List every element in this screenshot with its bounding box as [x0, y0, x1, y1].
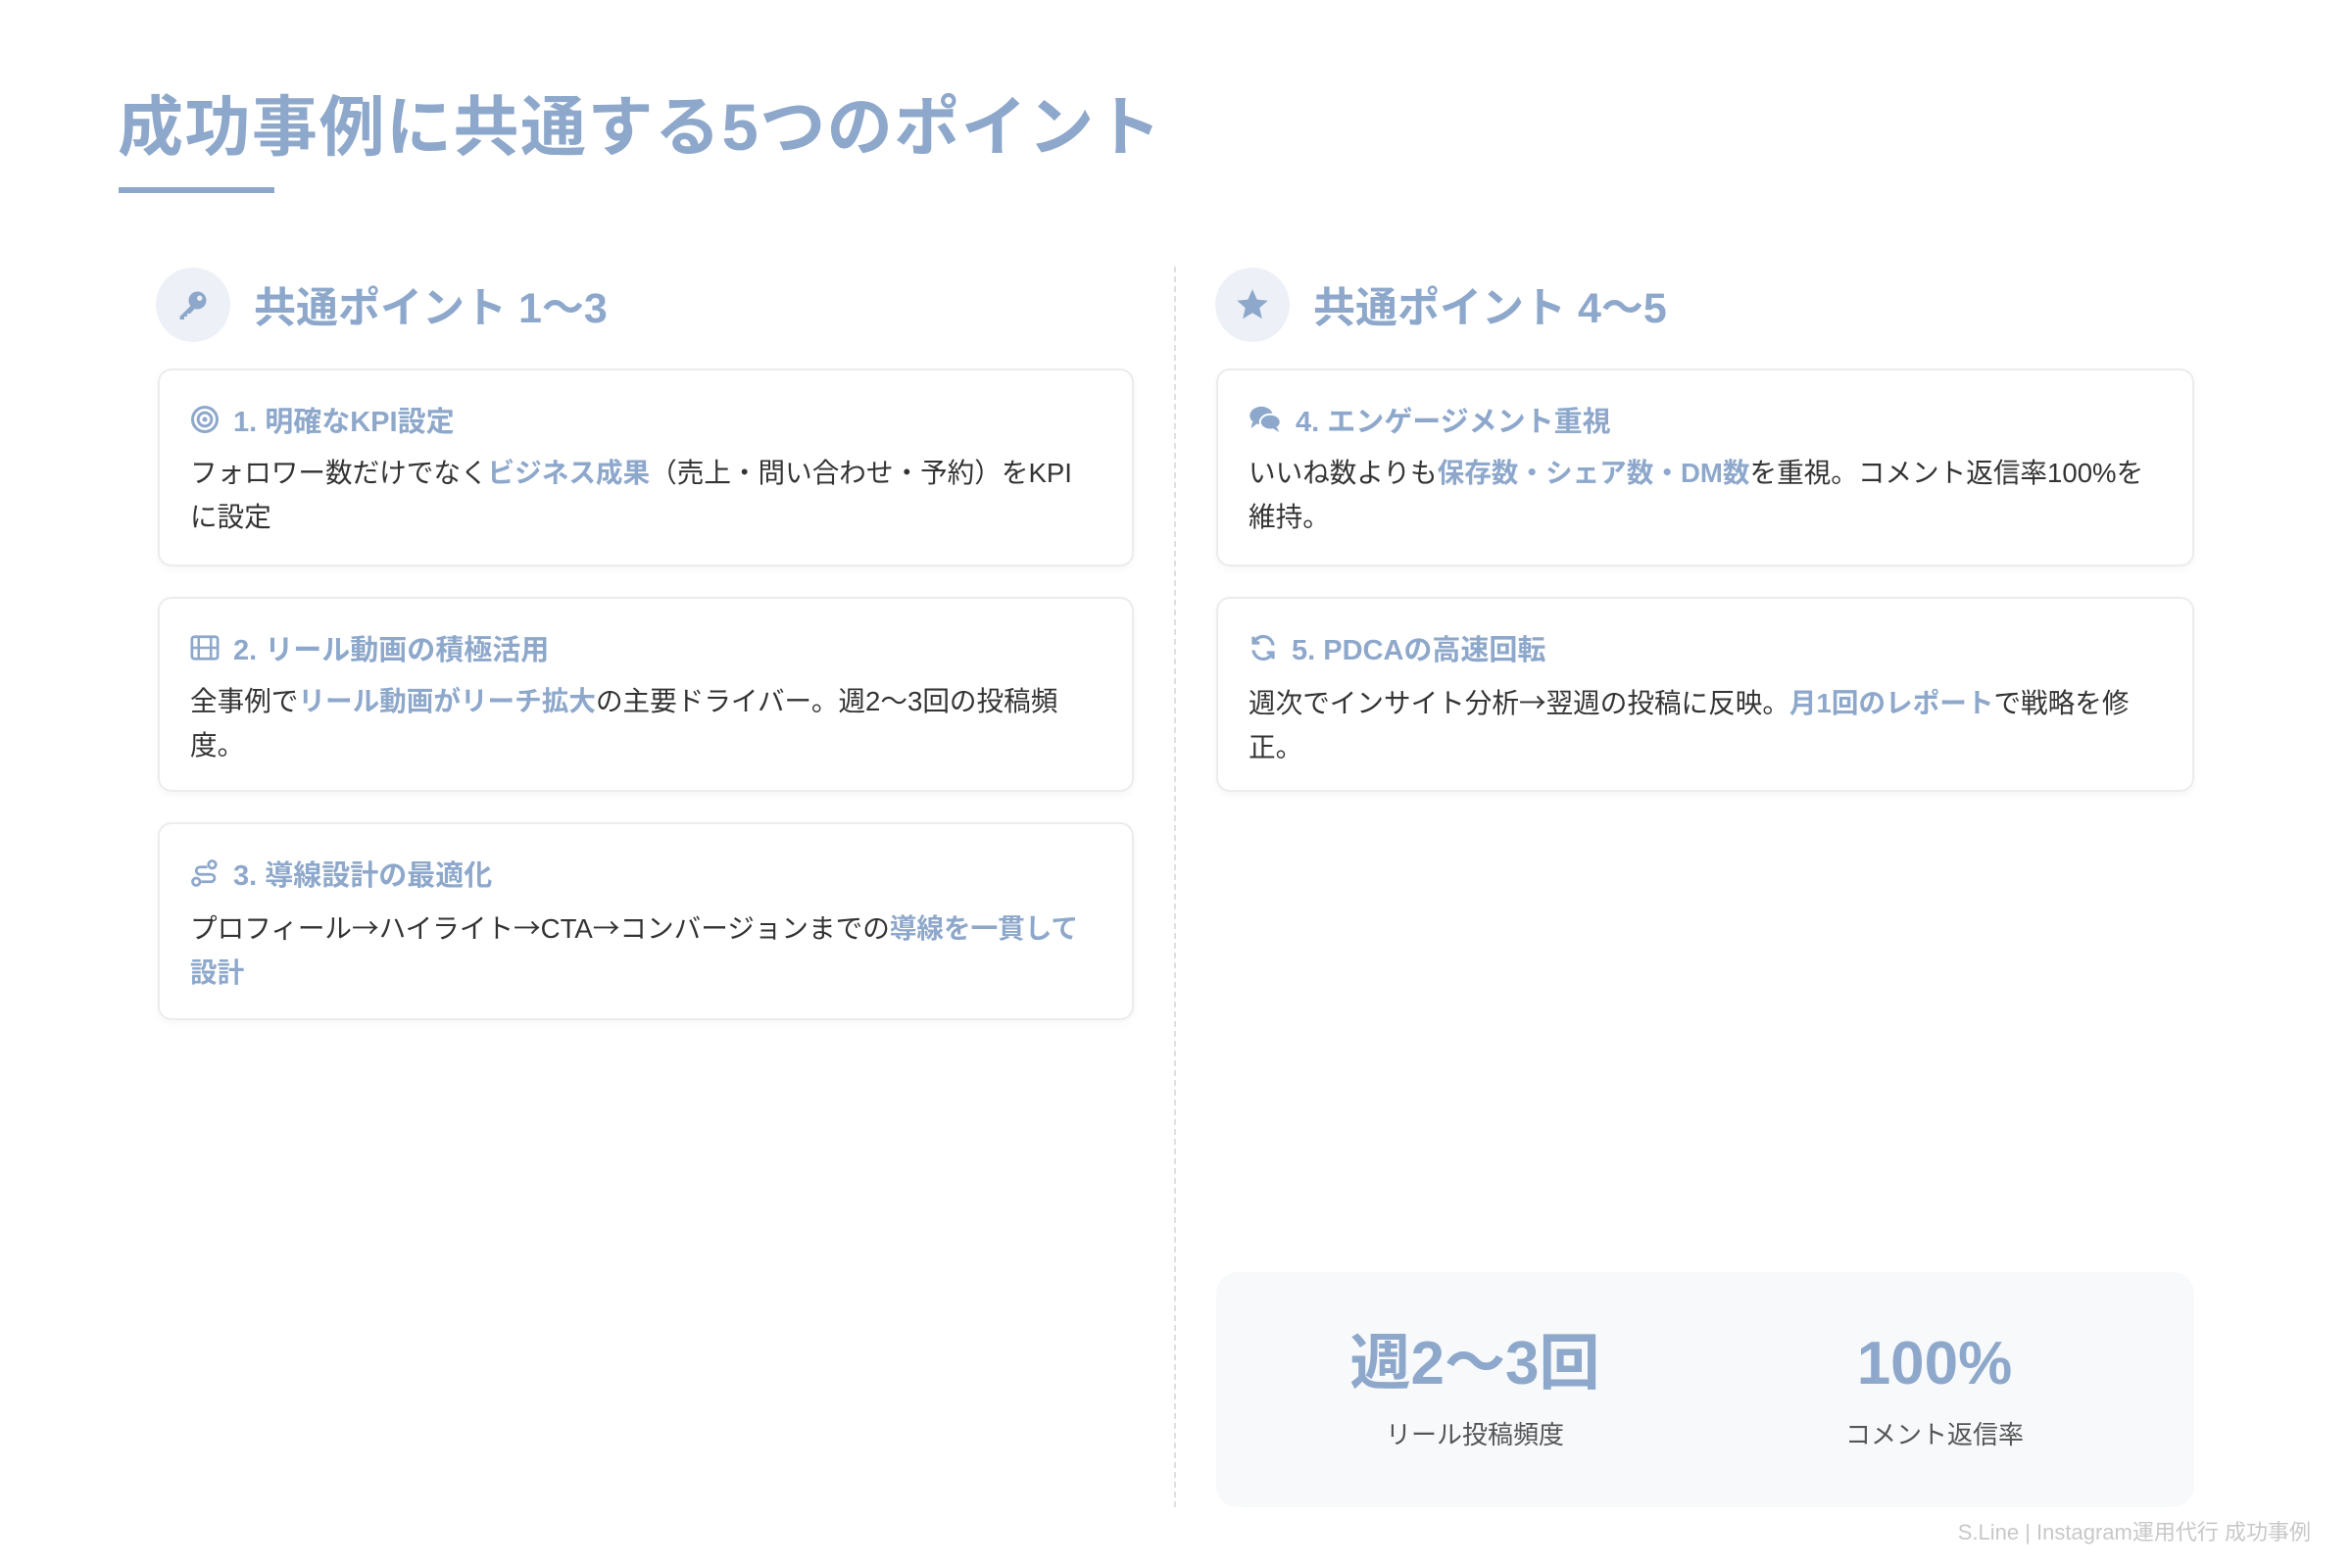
- stat: comment reply rate: コメント返信率: [1845, 1420, 2024, 1449]
- stat: comment reply rate: 100%: [1857, 1330, 2012, 1397]
- card 3 title: 3. 導線設計の最適化: [233, 860, 492, 892]
- title underline: [119, 187, 274, 193]
- card 5 title: 5. PDCAの高速回転: [1292, 635, 1545, 666]
- section header: points 4-5: 共通ポイント 4〜5: [1313, 285, 1667, 332]
- stat: reel frequency: 週2〜3回: [1350, 1330, 1599, 1397]
- card 4 title: 4. エンゲージメント重視: [1296, 407, 1611, 438]
- title: 成功事例に共通する5つのポイント: [118, 91, 1162, 165]
- card 1 body: フォロワー数だけでなくビジネス成果（売上・問い合わせ・予約）をKPIに設定: [190, 458, 1072, 532]
- icon: key: [156, 268, 230, 342]
- stats panel: [1216, 1272, 2194, 1507]
- section header: points 1-3: 共通ポイント 1〜3: [254, 285, 608, 332]
- icon: star: [1215, 268, 1290, 342]
- card 2 title: 2. リール動画の積極活用: [233, 635, 549, 666]
- stat: reel frequency: リール投稿頻度: [1386, 1420, 1564, 1449]
- card 2: [158, 597, 1134, 792]
- card 2 body: 全事例でリール動画がリーチ拡大の主要ドライバー。週2〜3回の投稿頻度。: [190, 686, 1057, 760]
- card 5: [1216, 597, 2194, 792]
- footer: S.Line | Instagram運用代行 成功事例: [1958, 1520, 2311, 1544]
- section header: points 1-3: [156, 268, 608, 342]
- stat: comment reply rate: [1845, 1330, 2024, 1449]
- card 4: [1216, 368, 2194, 566]
- card 1: [158, 368, 1134, 566]
- card 1 title: 1. 明確なKPI設定: [233, 407, 455, 438]
- card 3 body: プロフィール→ハイライト→CTA→コンバージョンまでの導線を一貫して設計: [190, 906, 1078, 988]
- card 3: [158, 822, 1134, 1020]
- divider: [1174, 267, 1176, 1507]
- card 4 body: いいね数よりも保存数・シェア数・DM数を重視。コメント返信率100%を維持。: [1249, 458, 2143, 532]
- section header: points 4-5: [1215, 268, 1667, 342]
- stat: reel frequency: [1350, 1330, 1599, 1449]
- card 5 body: 週次でインサイト分析→翌週の投稿に反映。月1回のレポートで戦略を修正。: [1249, 681, 2129, 762]
